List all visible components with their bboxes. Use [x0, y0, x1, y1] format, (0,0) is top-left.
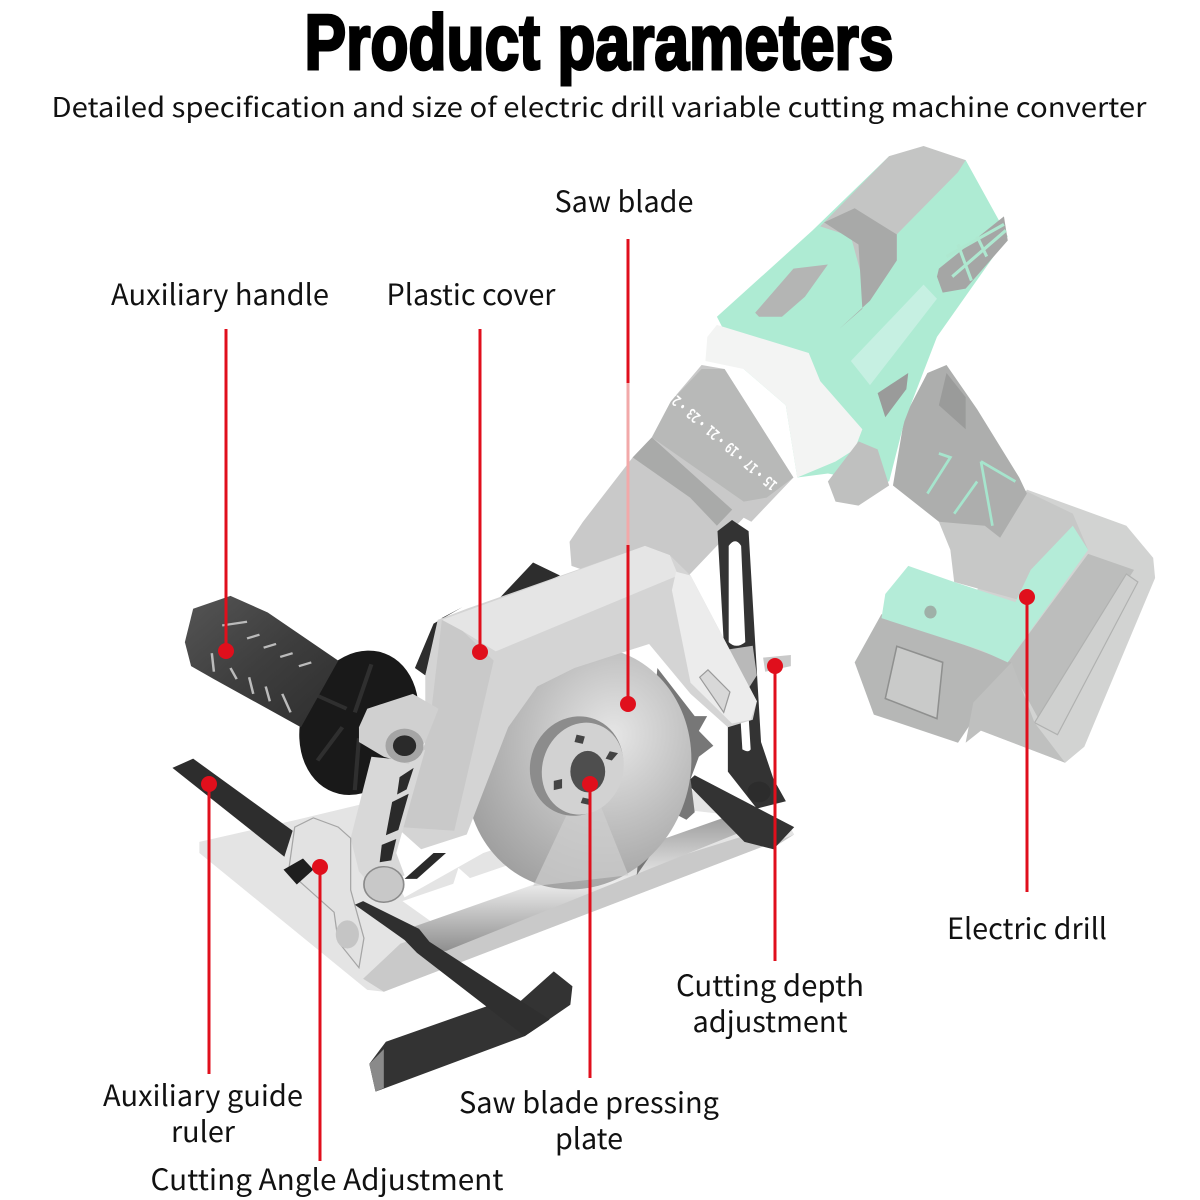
- dark band: [824, 208, 897, 329]
- black side strip: [415, 607, 463, 675]
- round bar: [413, 814, 749, 951]
- battery top recess: [1008, 554, 1134, 719]
- label: saw blade: Saw blade: [554, 179, 694, 221]
- depth pipe: [728, 646, 757, 701]
- callout lines: [209, 239, 1027, 1161]
- cover left face: [400, 620, 494, 831]
- battery latch: [885, 646, 943, 719]
- blade light wedge: [533, 772, 628, 886]
- green foot: [881, 526, 1088, 662]
- outer flange: [521, 710, 632, 822]
- handle: [893, 365, 1027, 538]
- label: cutting angle adjustment: Cutting Angle Adjustment: [150, 1157, 504, 1199]
- nut: [570, 751, 605, 792]
- cover right face: [672, 572, 757, 724]
- ruler foot: [369, 971, 572, 1092]
- trigger: [828, 441, 889, 506]
- angle bracket: [284, 818, 364, 968]
- depth screw: [763, 655, 791, 672]
- switch: [755, 265, 828, 317]
- knob: [284, 859, 313, 884]
- side panel: [851, 285, 937, 385]
- inner flange: [534, 717, 632, 820]
- speed numbers: 15 •17 •19 •21 •23 •25: [663, 387, 781, 495]
- grip slits: [212, 622, 311, 712]
- arm knob: [359, 694, 439, 764]
- grey top shell: [820, 146, 966, 293]
- black motor back: [500, 563, 560, 598]
- title: Product parameters: [304, 0, 894, 86]
- arm slots: [380, 768, 414, 862]
- plastic cover: [400, 546, 757, 849]
- collar: [705, 325, 862, 478]
- tool assembly: [172, 520, 794, 1092]
- cover top face: [442, 546, 678, 651]
- base window: [402, 809, 740, 923]
- handle green line: [927, 453, 1015, 526]
- label: plastic cover: Plastic cover: [386, 272, 556, 314]
- disc spokes: [313, 664, 371, 790]
- handle stripe: [939, 373, 966, 429]
- base slots: [450, 868, 479, 905]
- head underlay: [717, 156, 1008, 482]
- battery lower face: [966, 662, 1065, 763]
- foot screw: [924, 606, 937, 619]
- label: auxiliary guide ruler: ruler: [171, 1109, 236, 1151]
- auxiliary handle: [185, 596, 338, 727]
- label: electric drill: Electric drill: [947, 906, 1107, 948]
- label: saw blade pressing plate: Saw blade pressing: [459, 1080, 719, 1122]
- label: cutting depth adjustment: adjustment: [692, 999, 848, 1041]
- ruler rear: [172, 759, 293, 857]
- cover sticker: [700, 670, 730, 712]
- label: saw blade pressing plate: plate: [555, 1116, 623, 1158]
- torque ring: [652, 369, 793, 502]
- mount slot: [405, 853, 446, 879]
- label: cutting depth adjustment: [676, 963, 864, 1041]
- knob ring: [385, 729, 424, 763]
- electric drill: [570, 146, 1155, 763]
- blade disc: [445, 630, 713, 905]
- label: auxiliary guide ruler: Auxiliary guide: [103, 1073, 303, 1115]
- arm: [351, 749, 425, 890]
- bracket plate: [288, 818, 364, 968]
- label: saw blade pressing plate: [459, 1080, 719, 1158]
- dark rear bracket: [686, 775, 794, 849]
- vent: [937, 216, 1008, 293]
- handle disc: [283, 639, 435, 806]
- foot edge: [369, 1049, 384, 1092]
- cover body: [400, 546, 757, 849]
- flange holes: [554, 735, 618, 805]
- battery side panel: [1035, 574, 1138, 735]
- lower rail: [363, 834, 794, 992]
- vent grid: [947, 224, 1006, 281]
- rivet: [336, 920, 359, 948]
- grip: [185, 596, 338, 727]
- guide ruler: [355, 901, 550, 1036]
- side grip switch: [878, 373, 908, 417]
- chuck: [570, 365, 793, 582]
- battery back: [943, 490, 1155, 763]
- rear bolt: [747, 782, 771, 802]
- subtitle: Detailed specification and size of electric drill variable cutting machine converter: [52, 86, 1147, 125]
- teeth: [637, 668, 713, 875]
- pressing plate: [521, 710, 632, 822]
- base plate: [199, 786, 794, 992]
- chuck dark ring: [633, 437, 732, 526]
- label: cutting depth adjustment: Cutting depth: [676, 963, 864, 1005]
- knob hole: [393, 735, 416, 756]
- label: auxiliary handle: Auxiliary handle: [111, 272, 329, 314]
- lower nut: [364, 867, 404, 902]
- callout dots: [201, 589, 1035, 875]
- handle neck: [939, 490, 1088, 602]
- slotted bracket: [718, 520, 786, 809]
- label: auxiliary guide ruler: [103, 1073, 303, 1151]
- battery front: [855, 614, 1012, 743]
- saw blade: [445, 630, 713, 905]
